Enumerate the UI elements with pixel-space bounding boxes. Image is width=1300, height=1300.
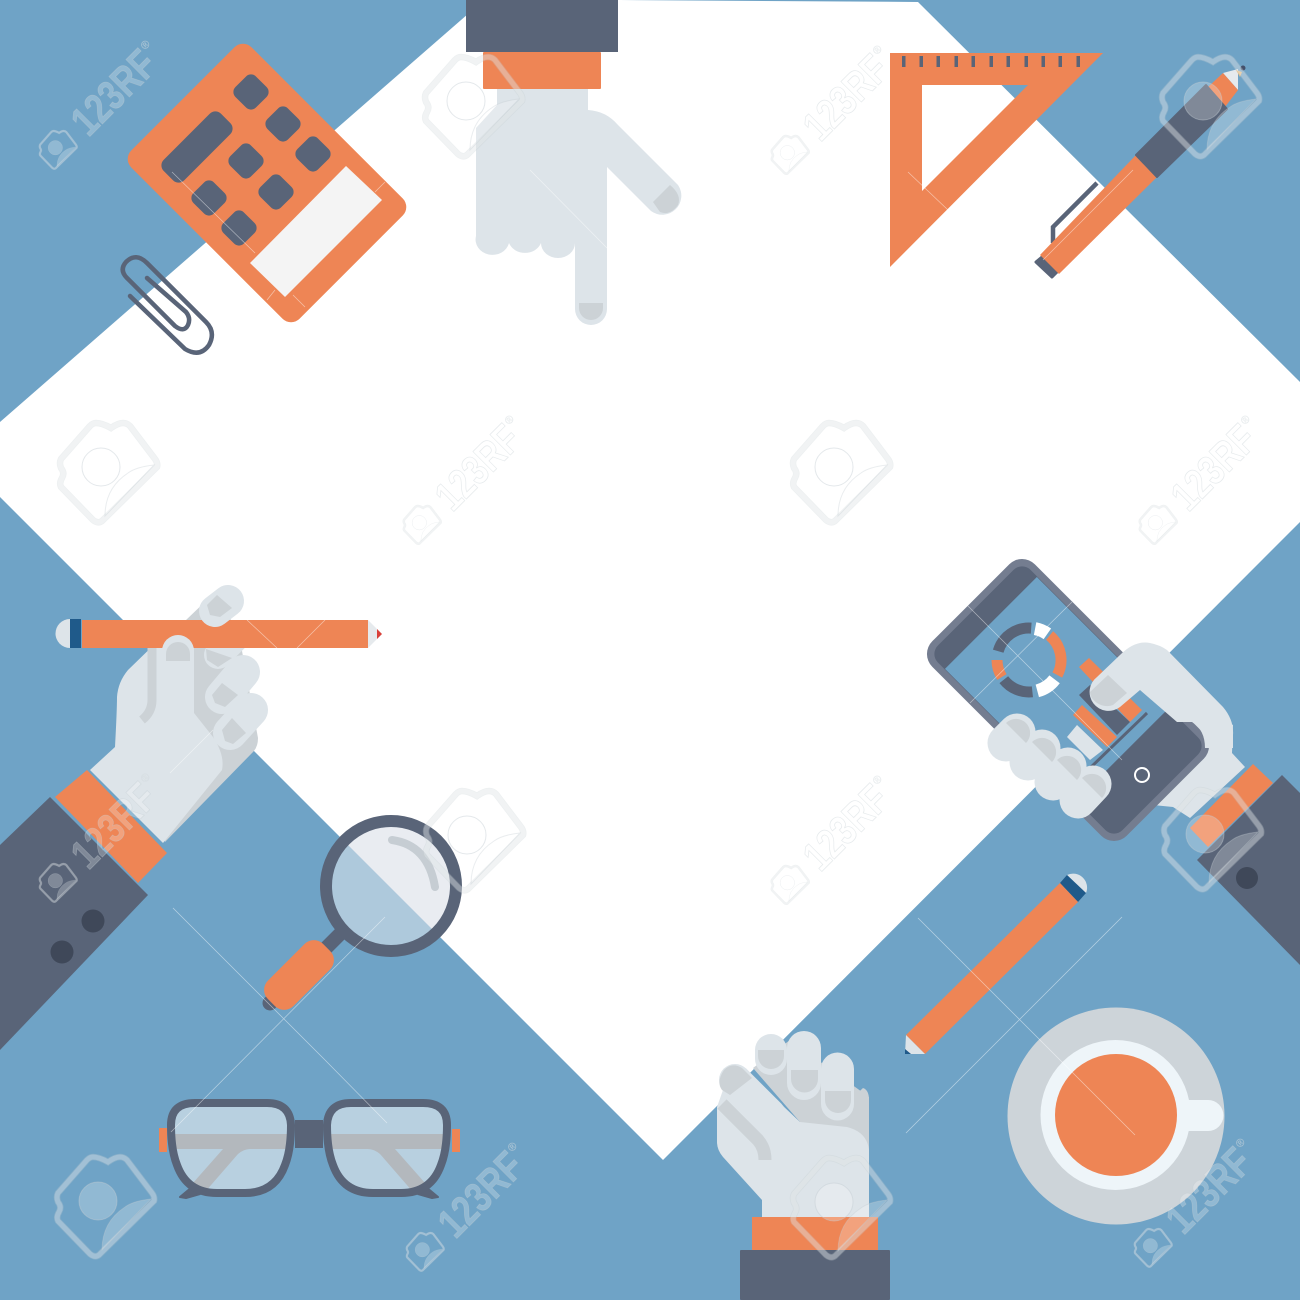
watermark: 123RF row 3 right: 123RF [794,775,897,879]
smartphone [920,552,1216,848]
watermark: 123RF row 1 left: ® [139,38,153,52]
right lens [323,1103,453,1193]
watermark: 123RF row 3 left: 123RF [62,773,165,877]
watermark: 123RF row 2 centre [385,407,540,562]
bar chart on screen [1067,658,1147,770]
icon: pencil on desk [905,874,1087,1054]
hand: fist from bottom [717,1031,890,1300]
pencil held in hand [56,619,382,648]
icon: pen [1036,66,1246,277]
icon: glasses [159,1103,460,1198]
watermark: 123RF row 4 right: 123RF [1157,1138,1260,1242]
watermark: 123RF row 1 right: ® [871,43,885,57]
watermark: 123RF row 1 left: 123RF [62,40,165,144]
watermark: 123RF row 4 centre [388,1134,543,1289]
icon: magnifying glass [259,815,462,1015]
icon: calculator [123,39,411,327]
hand: pointing from top [466,0,681,325]
watermark: 123RF row 2 right: ® [1239,413,1253,427]
watermark: 123RF row 4 centre: ® [506,1140,520,1154]
icon: paperclip [123,257,212,353]
watermark: 123RF row 3 left: ® [139,771,153,785]
hand: holding pencil, left [0,595,382,1050]
watermark: 123RF row 2 right [1121,407,1276,562]
watermark: 123RF row 2 centre: ® [503,413,517,427]
left lens [165,1103,295,1193]
donut chart on screen [997,628,1061,692]
watermark: 123RF row 3 left [21,765,176,920]
watermark: 123RF row 4 centre: 123RF [429,1142,532,1246]
watermark: 123RF row 1 right [753,37,908,192]
watermark: 123RF row 4 right [1116,1130,1271,1285]
watermark: 123RF row 4 right: ® [1234,1136,1248,1150]
icon: coffee cup on saucer [1008,1008,1224,1224]
watermark: 123RF row 3 right [753,767,908,922]
watermark: 123RF row 1 right: 123RF [794,45,897,149]
watermark: 123RF row 3 right: ® [871,773,885,787]
icon: set square ruler [890,53,1103,267]
watermark: 123RF row 2 right: 123RF [1162,415,1265,519]
hand: holding smartphone [920,552,1300,965]
watermark: 123RF row 2 centre: 123RF [426,415,529,519]
watermark: 123RF row 1 left [21,32,176,187]
